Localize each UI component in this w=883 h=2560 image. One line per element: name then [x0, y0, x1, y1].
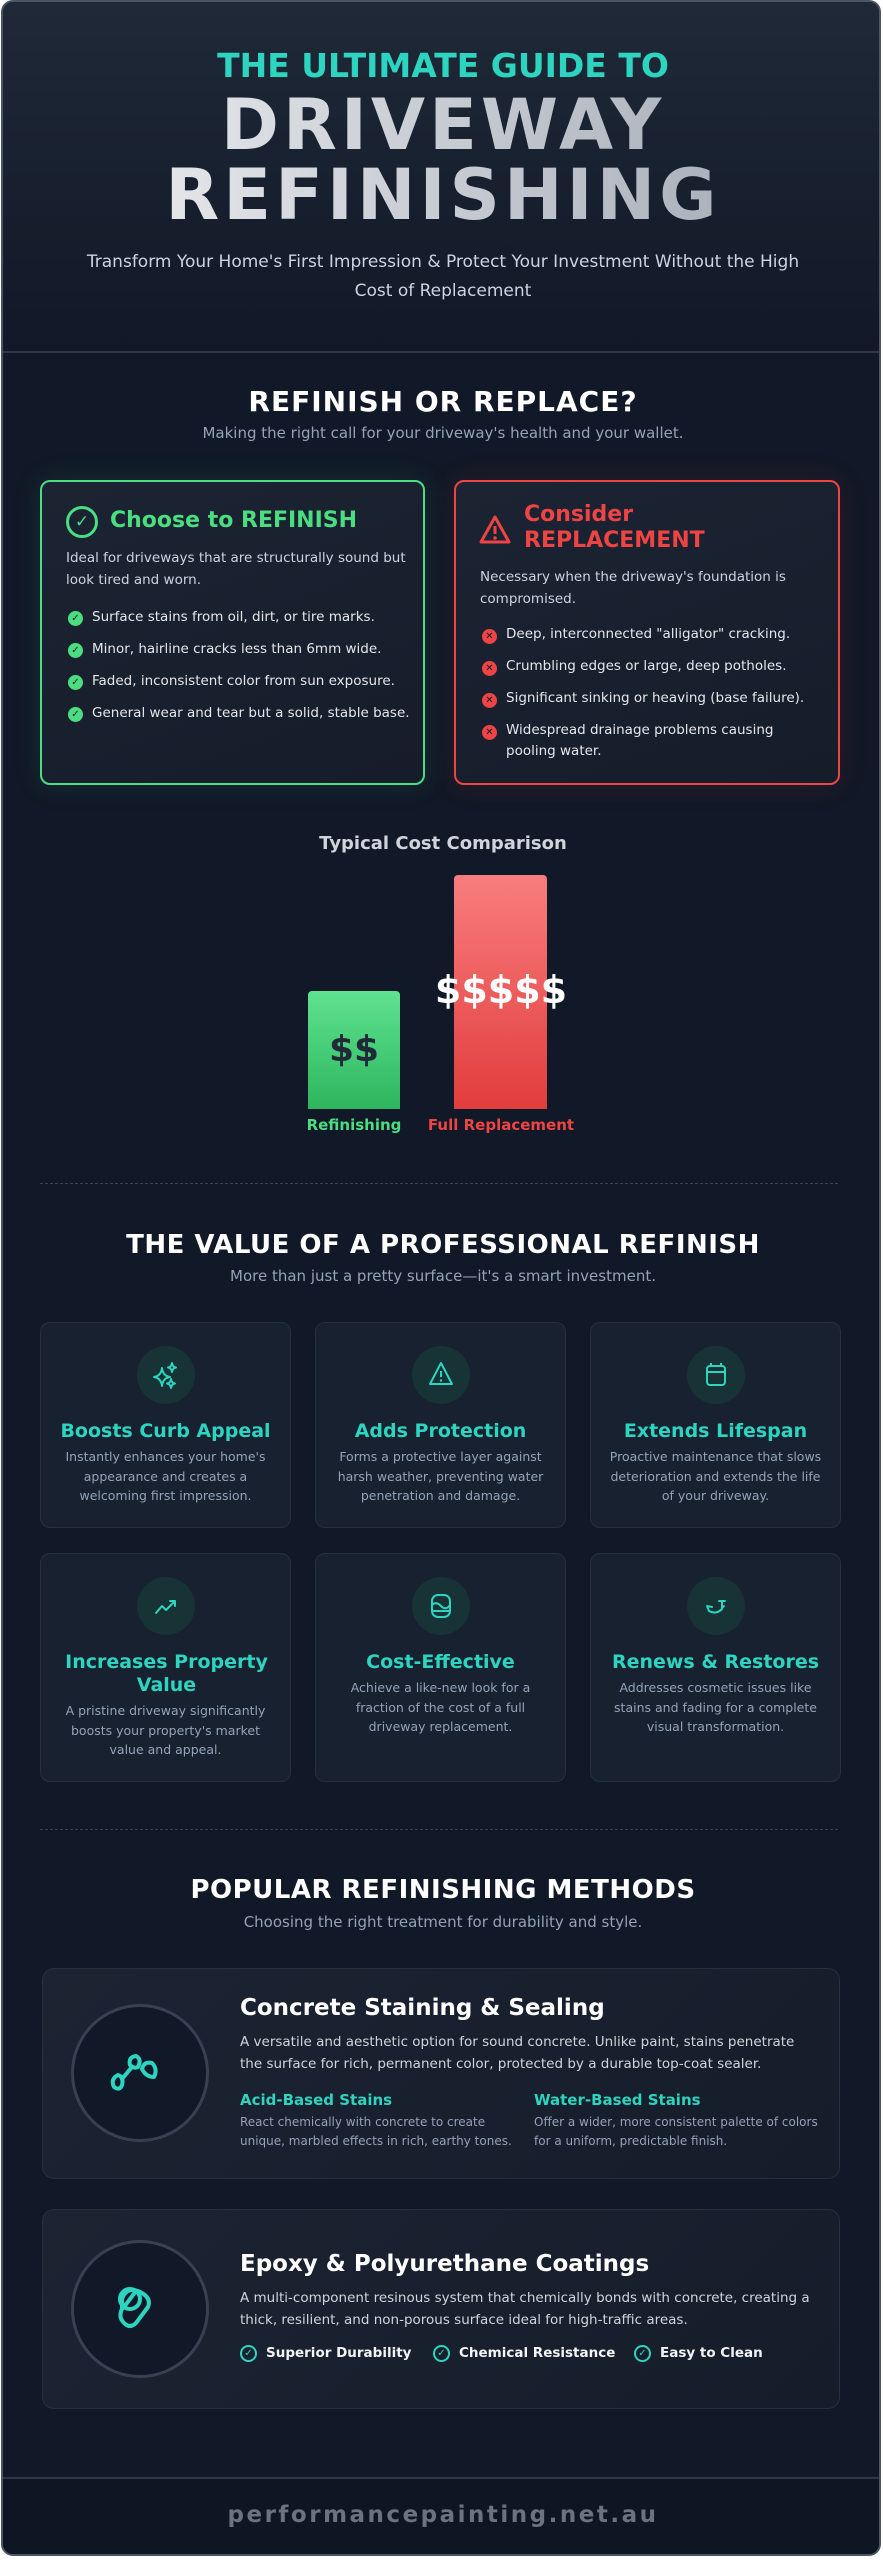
features: ✓ — [437, 2348, 446, 2359]
section subtitle: Choosing the right treatment for durability and style. — [244, 1913, 642, 1931]
label: replacement: Full Replacement — [428, 1116, 574, 1134]
card: protection — [315, 1322, 566, 1528]
icon circle: coating — [71, 2240, 209, 2378]
list: ✓ — [71, 645, 80, 656]
sub: water — [534, 2091, 818, 2148]
list — [68, 609, 410, 722]
list: ✕ — [485, 727, 494, 738]
features: ✓ — [638, 2348, 647, 2359]
list: Deep, interconnected "alligator" cracking. — [506, 626, 790, 642]
description: A multi-component resinous system that chemically bonds with concrete, creating a thick, resilient, and non-porous surface ideal for high-traffic areas. — [240, 2290, 810, 2328]
title: Renews & Restores — [612, 1651, 819, 1673]
bar: replacement — [454, 875, 547, 1109]
features — [240, 2345, 763, 2362]
list: Minor, hairline cracks less than 6mm wide. — [92, 641, 381, 657]
features: Chemical Resistance — [459, 2345, 615, 2361]
section heading: value: THE VALUE OF A PROFESSIONAL REFINISH — [126, 1230, 760, 1260]
card: curb appeal — [40, 1322, 291, 1528]
list: Significant sinking or heaving (base failure). — [506, 690, 804, 706]
list: Widespread drainage problems causing pooling water. — [506, 722, 773, 759]
card: cost effective — [315, 1553, 566, 1782]
description: A versatile and aesthetic option for sound concrete. Unlike paint, stains penetrate the surface for rich, permanent color, protected by a durable top-coat sealer. — [240, 2034, 794, 2072]
footer — [3, 2477, 883, 2558]
list: ✓ — [71, 613, 80, 624]
list: General wear and tear but a solid, stable base. — [92, 705, 410, 721]
chart title: Typical Cost Comparison — [319, 833, 567, 854]
title: Adds Protection — [355, 1420, 526, 1442]
sub: water: Offer a wider, more consistent palette of colors for a uniform, predictable finish. — [534, 2115, 818, 2148]
text: Proactive maintenance that slows deterioration and extends the life of your driveway. — [610, 1449, 821, 1503]
heading — [524, 502, 705, 553]
heading: REPLACEMENT — [524, 528, 705, 553]
list: ✓ — [71, 677, 80, 688]
card: lifespan — [590, 1322, 841, 1528]
method card: staining — [42, 1968, 840, 2179]
panel: replace — [454, 480, 840, 785]
title: Cost-Effective — [366, 1651, 515, 1673]
icon: check circle: ✓ — [75, 512, 89, 532]
icon: trend — [136, 1577, 194, 1635]
section heading: refinish or replace: REFINISH OR REPLACE? — [248, 385, 638, 418]
icon: check circle — [66, 506, 98, 538]
text: A pristine driveway significantly boosts your property's market value and appeal. — [66, 1703, 265, 1757]
list: ✕ — [485, 631, 494, 642]
section subtitle: Making the right call for your driveway's health and your wallet. — [202, 424, 684, 442]
title: Epoxy & Polyurethane Coatings — [240, 2251, 649, 2277]
list: ✕ — [485, 695, 494, 706]
features: ✓ — [244, 2348, 253, 2359]
text: Instantly enhances your home's appearance and creates a welcoming first impression. — [66, 1449, 265, 1503]
description: Ideal for driveways that are structurally sound but look tired and worn. — [66, 550, 406, 588]
title: Extends Lifespan — [624, 1420, 807, 1442]
sub: water: Water-Based Stains — [534, 2091, 701, 2109]
sub: acid: Acid-Based Stains — [240, 2091, 392, 2109]
main title — [3, 90, 883, 230]
title: Boosts Curb Appeal — [60, 1420, 271, 1442]
section heading: methods: POPULAR REFINISHING METHODS — [190, 1875, 696, 1905]
main title: DRIVEWAY — [221, 84, 665, 166]
heading: Consider — [524, 502, 633, 527]
footer url: performancepainting.net.au — [228, 2502, 658, 2528]
main title: REFINISHING — [165, 154, 721, 236]
icon: warning — [480, 515, 511, 544]
card: renews — [590, 1553, 841, 1782]
list: ✕ — [485, 663, 494, 674]
icon: sparkles — [136, 1346, 194, 1404]
sub: acid: React chemically with concrete to create unique, marbled effects in rich, earthy tones. — [240, 2115, 512, 2148]
subtitle: Transform Your Home's First Impression & Protect Your Investment Without the High Cost of Replacement — [87, 252, 799, 301]
panel: refinish — [40, 480, 425, 785]
bar: refinishing: $$ — [329, 1029, 379, 1070]
method card: epoxy — [42, 2209, 840, 2409]
icon: restore — [686, 1577, 744, 1635]
list: ✓ — [71, 709, 80, 720]
list — [482, 626, 804, 759]
label: refinishing: Refinishing — [307, 1116, 401, 1134]
title: Increases Property Value — [65, 1651, 268, 1696]
icon: piggy — [412, 1577, 470, 1635]
heading: Choose to REFINISH — [110, 508, 357, 533]
features: Easy to Clean — [660, 2345, 763, 2361]
title kicker: THE ULTIMATE GUIDE TO — [217, 46, 669, 85]
chart: cost comparison — [307, 833, 574, 1134]
bar: refinishing — [308, 991, 400, 1109]
features: Superior Durability — [266, 2345, 411, 2361]
section subtitle: More than just a pretty surface—it's a smart investment. — [230, 1267, 656, 1285]
text: Achieve a like-new look for a fraction of the cost of a full driveway replacement. — [351, 1680, 530, 1734]
card: property value — [40, 1553, 291, 1782]
icon circle: brush — [71, 2004, 209, 2142]
icon: calendar — [686, 1346, 744, 1404]
value: replacement: $$$$$ — [435, 968, 567, 1012]
sub: acid — [240, 2091, 512, 2148]
icon: warning — [412, 1346, 470, 1404]
description: Necessary when the driveway's foundation is compromised. — [480, 569, 786, 607]
list: Crumbling edges or large, deep potholes. — [506, 658, 787, 674]
title: Concrete Staining & Sealing — [240, 1995, 605, 2021]
list: Faded, inconsistent color from sun exposure. — [92, 673, 395, 689]
text: Forms a protective layer against harsh weather, preventing water penetration and damage. — [338, 1449, 543, 1503]
header — [3, 2, 883, 353]
list: Surface stains from oil, dirt, or tire marks. — [92, 609, 375, 625]
text: Addresses cosmetic issues like stains and fading for a complete visual transformation. — [614, 1680, 817, 1734]
